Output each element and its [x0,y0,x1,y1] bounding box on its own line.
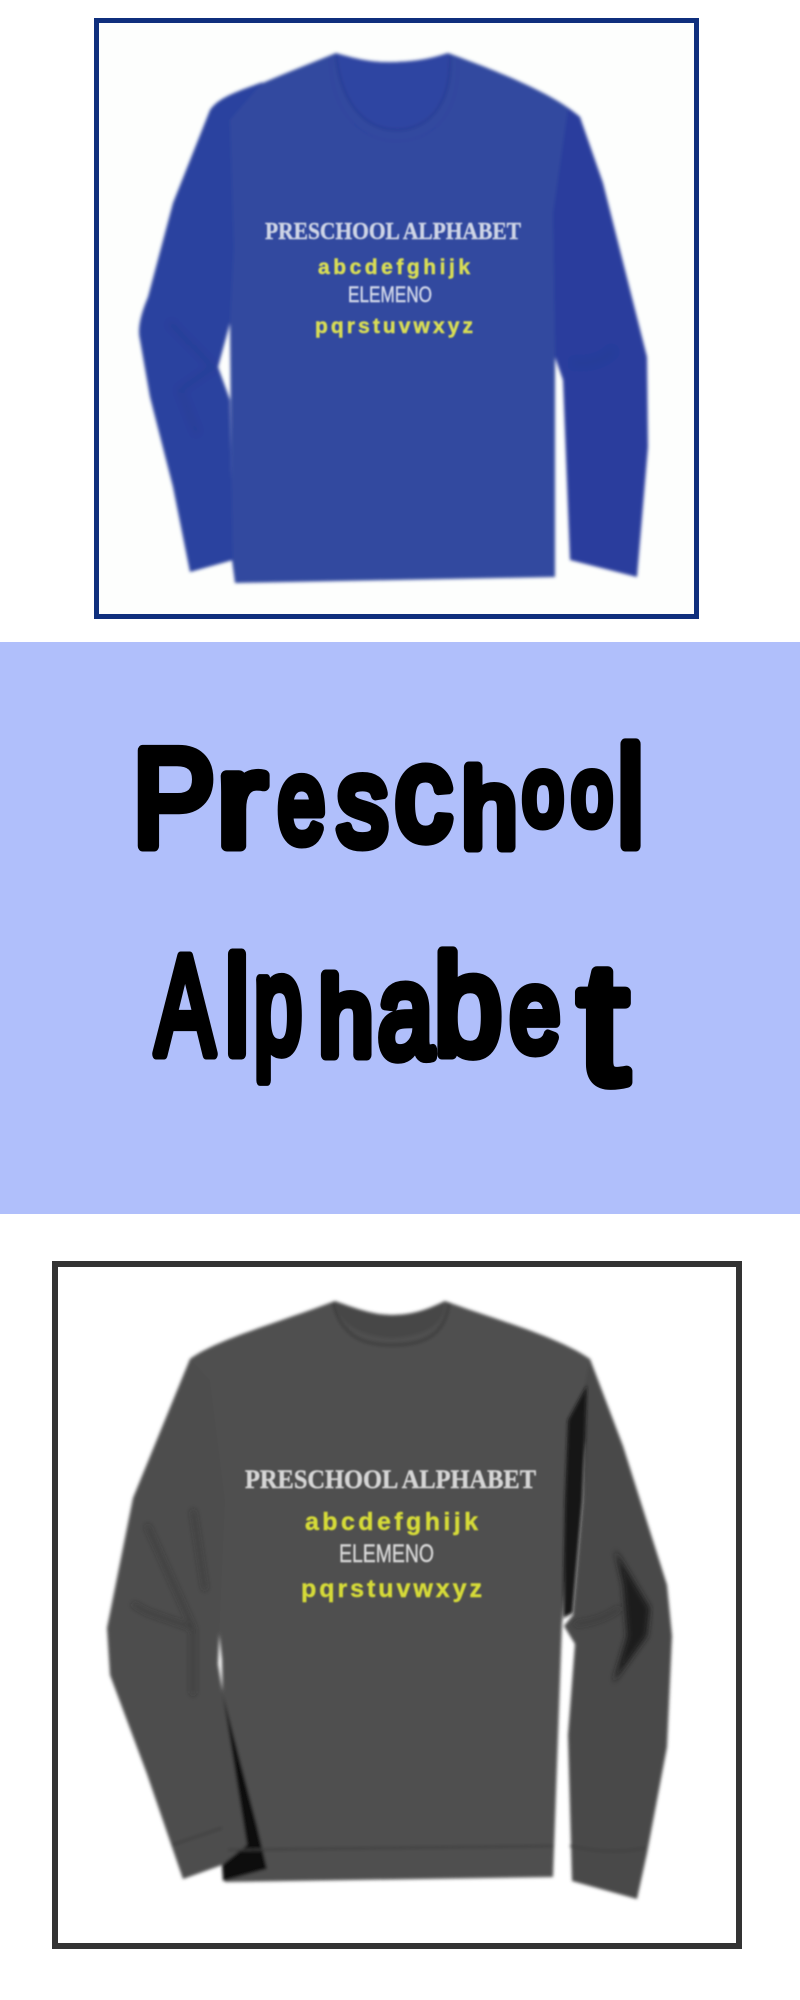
shirt print: heading: PRESCHOOL ALPHABET [265,219,521,245]
title: Preschool: s [337,733,388,872]
title: Preschool: P [132,721,215,876]
title: Alphabet: p [254,929,302,1082]
shirt print: heading: PRESCHOOL ALPHABET [245,1465,536,1494]
title: Preschool: o [572,739,612,844]
title: Alphabet: l [225,930,249,1084]
title: Preschool: c [395,720,452,867]
shirt print: first letters: abcdefghijk [305,1508,478,1536]
dark frame [55,1264,739,1946]
shirt print: first letters: abcdefghijk [318,256,470,279]
blue long-sleeve shirt [139,53,648,583]
title: Alphabet: A [156,926,214,1084]
shirt print: last letters: pqrstuvwxyz [301,1575,482,1603]
title: Alphabet: b [434,926,502,1084]
blue frame [96,20,696,616]
title: Preschool: l [617,718,644,876]
band background [0,642,800,1214]
title: Preschool: r [217,727,266,875]
shirt print: last letters: pqrstuvwxyz [315,315,473,338]
title: Alphabet: t [578,928,628,1120]
shirt print: elemeno: ELEMENO [339,1540,434,1568]
panel: title band [0,642,800,1214]
panel: grey sweatshirt product photo [55,1264,739,1946]
panel: blue long-sleeve shirt product photo [96,20,696,616]
title: Preschool: h [462,748,517,871]
grey sweatshirt [107,1301,672,1899]
sleeve shadows [133,1385,650,1695]
title: Alphabet: a [378,938,433,1085]
title: Preschool: e [278,736,325,868]
shirt print: elemeno: ELEMENO [348,282,432,307]
title: Alphabet: e [510,946,560,1076]
title: Preschool: o [523,739,563,844]
title: Alphabet: h [319,956,373,1079]
